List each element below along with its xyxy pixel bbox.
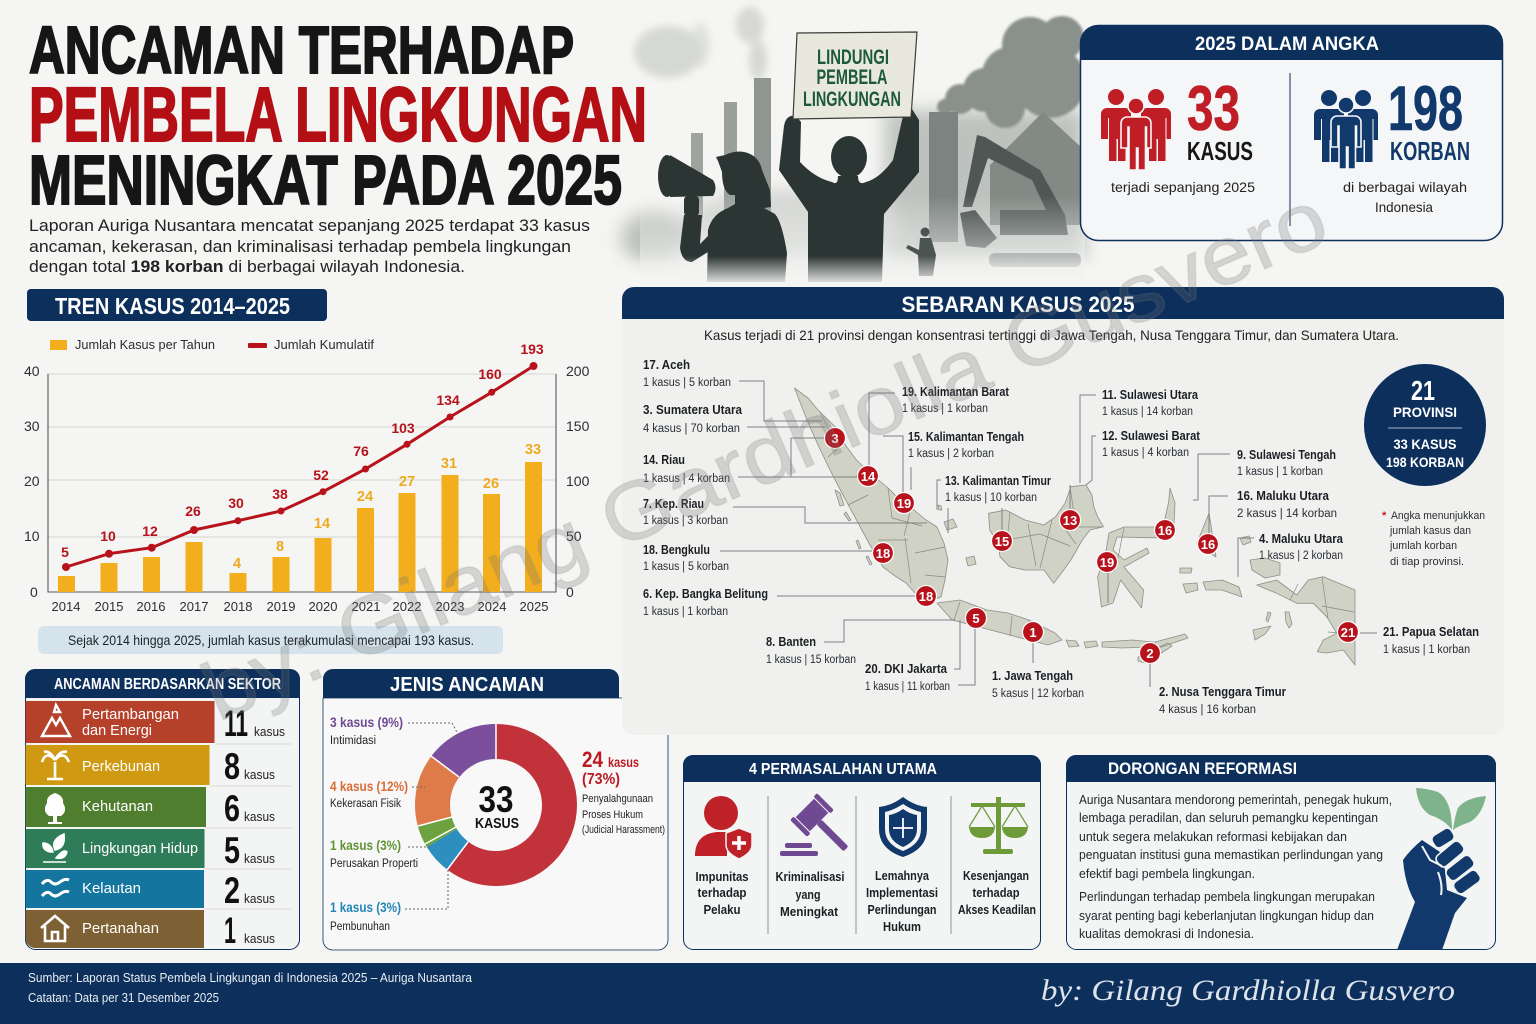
intro text: ancaman, kekerasan, dan kriminalisasi terhadap pembela lingkungan bbox=[29, 238, 571, 256]
label: pembunuhan: Pembunuhan bbox=[330, 921, 390, 933]
body text: efektif bagi pembela lingkungan. bbox=[1079, 867, 1255, 881]
footer bbox=[0, 963, 1536, 1024]
stat: 198 korban: 198 bbox=[1388, 74, 1463, 144]
intro text: Laporan Auriga Nusantara mencatat sepanjang 2025 terdapat 33 kasus bbox=[29, 217, 590, 235]
legend: Jumlah Kasus per Tahun bbox=[75, 337, 215, 352]
row: kehutanan bbox=[26, 787, 275, 829]
row: lingkungan hidup bbox=[26, 829, 275, 871]
intro text bbox=[29, 217, 590, 276]
year labels: 2020 bbox=[309, 599, 337, 614]
Lesser Sunda bbox=[1066, 634, 1188, 663]
bars: kasus per tahun bbox=[58, 462, 542, 592]
map markers: 3 bbox=[831, 431, 839, 446]
combo chart: 20 bbox=[24, 473, 40, 489]
label: judicial harassment: Proses Hukum bbox=[582, 809, 643, 821]
protester with megaphone bbox=[658, 152, 787, 282]
row: kelautan: 2 bbox=[224, 870, 240, 911]
footer: Catatan: Data per 31 Desember 2025 bbox=[28, 991, 219, 1005]
panel: 2025 dalam angka bbox=[1080, 25, 1503, 240]
bar value labels: 31 bbox=[441, 456, 457, 472]
legend bbox=[50, 337, 374, 352]
protest sign bbox=[793, 32, 917, 119]
year labels: 2014 bbox=[52, 599, 80, 614]
year labels: 2016 bbox=[137, 599, 165, 614]
item: kesenjangan: Akses Keadilan bbox=[958, 902, 1036, 917]
item: kesenjangan bbox=[958, 868, 1036, 917]
province labels: 1 kasus | 4 korban bbox=[643, 473, 730, 485]
map markers: 5 bbox=[972, 611, 980, 626]
callout: akumulasi bbox=[38, 626, 503, 654]
footnote bbox=[1382, 510, 1485, 568]
item: implementasi bbox=[866, 868, 938, 934]
province labels: 11. Sulawesi Utara bbox=[1102, 388, 1199, 402]
bar value labels: 8 bbox=[276, 539, 284, 555]
row: pertanahan: Pertanahan bbox=[82, 920, 159, 937]
map markers: 2 bbox=[1146, 646, 1154, 661]
panel: tren kasus bbox=[24, 289, 590, 654]
year labels: 2019 bbox=[267, 599, 295, 614]
body text: kualitas demokrasi di Indonesia. bbox=[1079, 927, 1254, 941]
item: implementasi: Perlindungan bbox=[868, 902, 937, 917]
cumulative value labels: 76 bbox=[353, 443, 369, 459]
combo chart: 0 bbox=[30, 584, 38, 600]
label: judicial harassment: 24 bbox=[582, 747, 604, 772]
province labels: 1 kasus | 3 korban bbox=[643, 515, 728, 527]
map markers: 19 bbox=[897, 496, 911, 511]
stat: 33 kasus bbox=[1111, 74, 1255, 195]
province labels: 18. Bengkulu bbox=[643, 543, 710, 557]
cumulative value labels: 134 bbox=[436, 392, 460, 408]
icon: leaves and fist bbox=[1397, 788, 1486, 950]
province labels: 4 kasus | 70 korban bbox=[643, 423, 740, 435]
item: kriminalisasi: Meningkat bbox=[780, 904, 839, 919]
row: kehutanan: 6 bbox=[224, 788, 240, 829]
line: kumulatif bbox=[62, 362, 538, 571]
body text bbox=[1079, 793, 1392, 941]
province labels: 3. Sumatera Utara bbox=[643, 403, 743, 417]
panel: jenis ancaman bbox=[323, 669, 668, 950]
footer: by: Gilang Gardhiolla Gusvero bbox=[1041, 974, 1455, 1007]
year labels: 2018 bbox=[224, 599, 252, 614]
body text: untuk segera melakukan reformasi kebijakan dan bbox=[1079, 830, 1347, 844]
smoke plume bbox=[937, 16, 1086, 128]
row: lingkungan hidup: kasus bbox=[244, 851, 275, 866]
province labels: 1 kasus | 1 korban bbox=[643, 606, 728, 618]
callout: akumulasi: Sejak 2014 hingga 2025, jumlah kasus terakumulasi mencapai 193 kasus. bbox=[68, 632, 474, 648]
province labels: 2. Nusa Tenggara Timur bbox=[1159, 685, 1286, 699]
year labels: 2025 bbox=[520, 599, 548, 614]
title: ANCAMAN TERHADAP bbox=[29, 13, 574, 88]
item: kriminalisasi: yang bbox=[796, 887, 821, 902]
map markers: 16 bbox=[1201, 537, 1215, 552]
cumulative value labels: 52 bbox=[313, 467, 329, 483]
row: pertanahan bbox=[26, 910, 275, 951]
bar value labels: 33 bbox=[525, 442, 541, 458]
combo chart: 150 bbox=[566, 418, 590, 434]
title bbox=[29, 13, 647, 219]
footnote: di tiap provinsi. bbox=[1390, 556, 1464, 568]
province labels: 1 kasus | 1 korban bbox=[1237, 466, 1323, 478]
map markers: 21 bbox=[1341, 625, 1355, 640]
map markers: 15 bbox=[995, 534, 1009, 549]
body text: lembaga peradilan, dan seluruh pemangku kepentingan bbox=[1079, 811, 1378, 825]
item: implementasi: Implementasi bbox=[866, 885, 938, 900]
year labels: 2015 bbox=[95, 599, 123, 614]
item: kesenjangan: Kesenjangan bbox=[963, 868, 1029, 883]
combo chart: 200 bbox=[566, 363, 590, 379]
icon: red people group bbox=[1101, 89, 1171, 170]
heading: tren kasus: TREN KASUS 2014–2025 bbox=[55, 293, 290, 319]
bar value labels: 24 bbox=[357, 489, 373, 505]
protest sign: LINGKUNGAN bbox=[803, 88, 901, 111]
item: impunitas bbox=[696, 869, 748, 917]
Kalimantan bbox=[989, 485, 1103, 583]
label: kekerasan fisik: Kekerasan Fisik bbox=[330, 798, 401, 810]
illustration: protesters and industrial backdrop bbox=[620, 7, 1090, 286]
province labels: 12. Sulawesi Barat bbox=[1102, 429, 1201, 443]
stat: 198 korban: KORBAN bbox=[1390, 136, 1470, 166]
row: perkebunan bbox=[26, 745, 275, 787]
item: impunitas: Pelaku bbox=[704, 902, 741, 917]
panel: sebaran kasus: SEBARAN KASUS 2025 bbox=[902, 292, 1134, 317]
footnote: jumlah kasus dan bbox=[1389, 525, 1471, 537]
title: MENINGKAT PADA 2025 bbox=[29, 141, 622, 219]
watermark: by: Gilang Gardhiolla Gusvero bbox=[189, 172, 1340, 739]
donut chart: 33 bbox=[478, 779, 514, 820]
title: PEMBELA LINGKUNGAN bbox=[29, 72, 647, 158]
combo chart: 100 bbox=[566, 473, 590, 489]
province labels: 1 kasus | 14 korban bbox=[1102, 406, 1193, 418]
bar value labels: 14 bbox=[314, 516, 330, 532]
Maluku bbox=[1180, 513, 1251, 597]
province labels: 6. Kep. Bangka Belitung bbox=[643, 587, 768, 601]
row: kehutanan: kasus bbox=[244, 809, 275, 824]
province labels: 1 kasus | 2 korban bbox=[1259, 550, 1343, 562]
body text: Perlindungan terhadap pembela lingkungan merupakan bbox=[1079, 890, 1375, 904]
label: intimidasi: 3 kasus (9%) bbox=[330, 714, 403, 730]
mine mountain bbox=[990, 112, 1082, 225]
label: kekerasan fisik: 4 kasus (12%) bbox=[330, 778, 408, 794]
province labels: 13. Kalimantan Timur bbox=[945, 474, 1051, 488]
panel: ancaman berdasarkan sektor bbox=[25, 669, 300, 951]
combo chart bbox=[24, 341, 590, 614]
label: judicial harassment: kasus bbox=[608, 754, 639, 770]
cumulative value labels: 12 bbox=[142, 523, 158, 539]
item: implementasi: Lemahnya bbox=[875, 868, 930, 883]
province labels: 1 kasus | 5 korban bbox=[643, 377, 731, 389]
row: kelautan bbox=[26, 870, 275, 911]
footnote: Angka menunjukkan bbox=[1391, 510, 1485, 522]
footnote: * bbox=[1382, 510, 1387, 522]
province labels: 1 kasus | 15 korban bbox=[766, 654, 856, 666]
year labels: 2024 bbox=[478, 599, 506, 614]
panel: 4 permasalahan utama bbox=[683, 755, 1041, 950]
donut chart bbox=[418, 724, 560, 870]
stat: 33 kasus: 33 bbox=[1187, 74, 1240, 144]
row: pertambangan dan energi: kasus bbox=[254, 724, 285, 739]
cumulative value labels: 30 bbox=[228, 495, 244, 511]
panel: sebaran kasus: Kasus terjadi di 21 provinsi dengan konsentrasi tertinggi di Jawa Tengah, Nusa Tenggara Timur, dan Sumatera Utara. bbox=[704, 327, 1399, 343]
province labels: 8. Banten bbox=[766, 635, 816, 649]
label: kekerasan fisik bbox=[330, 778, 408, 810]
province labels: 1 kasus | 4 korban bbox=[1102, 447, 1189, 459]
row: pertambangan dan energi bbox=[26, 701, 285, 744]
cumulative value labels bbox=[61, 341, 544, 560]
map markers: 18 bbox=[876, 546, 890, 561]
small figure bbox=[906, 228, 936, 276]
year labels bbox=[52, 599, 548, 614]
smokestacks bbox=[691, 78, 958, 242]
province labels bbox=[643, 358, 1479, 716]
panel: sebaran kasus bbox=[622, 287, 1504, 735]
province labels: 1 kasus | 1 korban bbox=[1383, 644, 1470, 656]
footnote: jumlah korban bbox=[1389, 540, 1457, 552]
map markers: 14 bbox=[861, 469, 876, 484]
icon: gavel bbox=[780, 793, 859, 862]
leader lines bbox=[720, 381, 1377, 687]
cumulative value labels: 26 bbox=[185, 503, 201, 519]
row: pertanahan: kasus bbox=[244, 931, 275, 946]
province labels: 1 kasus | 2 korban bbox=[908, 448, 994, 460]
bar value labels: 4 bbox=[233, 556, 241, 572]
panel: 2025 dalam angka: 2025 DALAM ANGKA bbox=[1195, 34, 1379, 55]
map markers: 19 bbox=[1100, 555, 1114, 570]
province labels: 4 kasus | 16 korban bbox=[1159, 704, 1256, 716]
item: kriminalisasi bbox=[776, 869, 844, 919]
stat: 33 kasus: terjadi sepanjang 2025 bbox=[1111, 179, 1255, 195]
province labels: 9. Sulawesi Tengah bbox=[1237, 448, 1336, 462]
row: perkebunan: kasus bbox=[244, 767, 275, 782]
panel: dorongan reformasi bbox=[1066, 755, 1496, 950]
item: kriminalisasi: Kriminalisasi bbox=[776, 869, 844, 884]
province borders bbox=[820, 412, 1354, 638]
summary circle bbox=[1364, 364, 1486, 486]
province labels: 4. Maluku Utara bbox=[1259, 532, 1344, 546]
body text: syarat penting bagi keberlanjutan lingkungan hidup dan bbox=[1079, 909, 1374, 923]
stat: 198 korban: Indonesia bbox=[1375, 199, 1433, 215]
label: judicial harassment: (Judicial Harassment) bbox=[582, 824, 665, 836]
province labels: 1 kasus | 10 korban bbox=[945, 492, 1037, 504]
bar value labels: 26 bbox=[483, 476, 499, 492]
cumulative value labels: 193 bbox=[520, 341, 544, 357]
item: impunitas: terhadap bbox=[698, 885, 747, 900]
label: perusakan properti: 1 kasus (3%) bbox=[330, 837, 401, 853]
icon: impunitas person shield bbox=[695, 796, 752, 859]
label: pembunuhan bbox=[330, 899, 401, 933]
combo chart: 10 bbox=[24, 528, 40, 544]
label: judicial harassment: Penyalahgunaan bbox=[582, 793, 653, 805]
province labels: 16. Maluku Utara bbox=[1237, 489, 1330, 503]
year labels: 2022 bbox=[393, 599, 421, 614]
stat: 33 kasus: KASUS bbox=[1187, 136, 1253, 166]
province labels: 1 kasus | 1 korban bbox=[902, 403, 988, 415]
summary circle: 21 bbox=[1411, 375, 1435, 406]
province labels: 20. DKI Jakarta bbox=[865, 662, 948, 676]
cumulative value labels: 10 bbox=[100, 528, 116, 544]
panel: dorongan reformasi: DORONGAN REFORMASI bbox=[1108, 759, 1297, 778]
province labels: 1 kasus | 5 korban bbox=[643, 561, 729, 573]
label: judicial harassment bbox=[582, 747, 665, 836]
year labels: 2017 bbox=[180, 599, 208, 614]
province labels: 7. Kep. Riau bbox=[643, 497, 704, 511]
combo chart: 50 bbox=[566, 528, 582, 544]
map of Indonesia bbox=[794, 388, 1355, 665]
province labels: 21. Papua Selatan bbox=[1383, 625, 1479, 639]
row: perkebunan: 8 bbox=[224, 746, 240, 787]
map markers: 18 bbox=[919, 589, 933, 604]
footer: Sumber: Laporan Status Pembela Lingkungan di Indonesia 2025 – Auriga Nusantara bbox=[28, 971, 472, 985]
label: perusakan properti: Perusakan Properti bbox=[330, 858, 418, 870]
label: pembunuhan: 1 kasus (3%) bbox=[330, 899, 401, 915]
protest sign: PEMBELA bbox=[816, 66, 888, 89]
province labels: 17. Aceh bbox=[643, 358, 690, 372]
label: perusakan properti bbox=[330, 837, 418, 870]
row: lingkungan hidup: Lingkungan Hidup bbox=[82, 840, 198, 857]
row: pertambangan dan energi: dan Energi bbox=[82, 722, 152, 739]
row: perkebunan: Perkebunan bbox=[82, 758, 160, 775]
row: kelautan: kasus bbox=[244, 891, 275, 906]
small islands bbox=[1253, 612, 1292, 640]
combo chart: 40 bbox=[24, 363, 40, 379]
item: kesenjangan: terhadap bbox=[972, 885, 1020, 900]
item: implementasi: Hukum bbox=[883, 919, 921, 934]
intro text: dengan total 198 korban di berbagai wilayah Indonesia. bbox=[29, 258, 465, 276]
province labels: 1. Jawa Tengah bbox=[992, 669, 1073, 683]
stat: 198 korban bbox=[1343, 74, 1470, 215]
map markers: 16 bbox=[1158, 523, 1172, 538]
province labels: 15. Kalimantan Tengah bbox=[908, 430, 1024, 444]
row: kehutanan: Kehutanan bbox=[82, 798, 153, 815]
bar value labels bbox=[233, 442, 541, 572]
row: pertanahan: 1 bbox=[224, 910, 236, 951]
stat: 198 korban: di berbagai wilayah bbox=[1343, 179, 1467, 195]
icon: blue people group bbox=[1314, 90, 1378, 169]
donut chart: KASUS bbox=[475, 815, 519, 832]
Java bbox=[937, 600, 1062, 645]
panel: ancaman berdasarkan sektor: ANCAMAN BERDASARKAN SEKTOR bbox=[54, 676, 281, 693]
protester with sign bbox=[779, 109, 919, 282]
protest sign: LINDUNGI bbox=[817, 46, 889, 69]
item: impunitas: Impunitas bbox=[696, 869, 748, 884]
Sumatra bbox=[794, 388, 948, 603]
bar value labels: 27 bbox=[399, 474, 415, 490]
map markers bbox=[824, 428, 1358, 664]
province labels: 5 kasus | 12 korban bbox=[992, 688, 1084, 700]
province labels: 2 kasus | 14 korban bbox=[1237, 508, 1337, 520]
cumulative value labels: 103 bbox=[391, 420, 415, 436]
panel: jenis ancaman: JENIS ANCAMAN bbox=[390, 674, 544, 696]
year labels: 2023 bbox=[436, 599, 464, 614]
row: lingkungan hidup: 5 bbox=[224, 830, 240, 871]
excavator bbox=[960, 135, 1081, 267]
cumulative value labels: 38 bbox=[272, 486, 288, 502]
icon: shield bbox=[879, 797, 927, 857]
label: judicial harassment: (73%) bbox=[582, 771, 620, 788]
icon: scales bbox=[969, 797, 1028, 854]
body text: Auriga Nusantara mendorong pemerintah, penegak hukum, bbox=[1079, 793, 1392, 807]
province labels: 1 kasus | 11 korban bbox=[865, 681, 950, 693]
row: kelautan: Kelautan bbox=[82, 880, 141, 897]
cumulative value labels: 160 bbox=[478, 366, 502, 382]
Papua bbox=[1250, 558, 1355, 665]
map markers: 1 bbox=[1029, 625, 1037, 640]
donut leader lines bbox=[405, 723, 460, 909]
legend: Jumlah Kumulatif bbox=[274, 337, 374, 352]
combo chart: 0 bbox=[566, 584, 574, 600]
Sulawesi bbox=[1098, 488, 1175, 608]
body text: penguatan institusi guna memastikan perlindungan yang bbox=[1079, 848, 1383, 862]
province labels: 14. Riau bbox=[643, 453, 685, 467]
row: pertambangan dan energi: Pertambangan bbox=[82, 706, 179, 723]
label: intimidasi bbox=[330, 714, 403, 747]
combo chart: 30 bbox=[24, 418, 40, 434]
year labels: 2021 bbox=[352, 599, 380, 614]
summary circle: 33 KASUS bbox=[1394, 436, 1456, 452]
cumulative value labels: 5 bbox=[61, 544, 69, 560]
label: intimidasi: Intimidasi bbox=[330, 735, 376, 747]
panel: 4 permasalahan utama: 4 PERMASALAHAN UTAMA bbox=[749, 761, 937, 778]
map markers: 13 bbox=[1063, 513, 1077, 528]
summary circle: 198 KORBAN bbox=[1386, 454, 1464, 470]
province labels: 19. Kalimantan Barat bbox=[902, 385, 1010, 399]
summary circle: PROVINSI bbox=[1393, 404, 1457, 420]
row: pertambangan dan energi: 11 bbox=[224, 703, 248, 744]
